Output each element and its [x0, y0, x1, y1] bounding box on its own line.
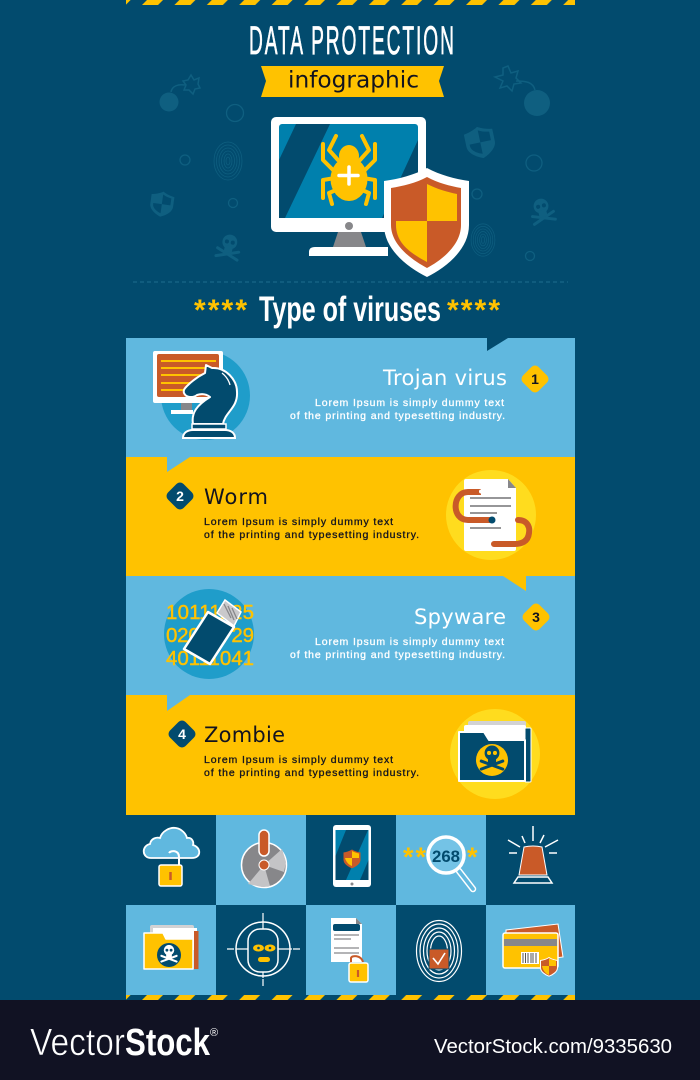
description: Lorem Ipsum is simply dummy text: [315, 397, 504, 409]
heading: Spyware: [414, 605, 506, 629]
icon: shield left: [149, 190, 175, 218]
title: DATA PROTECTION: [249, 18, 454, 63]
description: [204, 754, 419, 779]
icon: tablet shield: [333, 825, 371, 887]
icon: infected folder: [450, 709, 540, 799]
section heading: Type of viruses: [259, 290, 441, 329]
icon: alarm beacon: [508, 826, 558, 883]
description: of the printing and typesetting industry.: [290, 410, 505, 422]
faint background icons: [149, 66, 555, 260]
footer: [0, 1000, 700, 1080]
divider: [133, 281, 568, 283]
icon: disc alert: [242, 830, 286, 888]
description: [290, 397, 505, 422]
heading: Zombie: [204, 723, 285, 747]
icon: fingerprint right: [471, 224, 495, 256]
icon: document lock: [331, 918, 368, 982]
icon: magnifier password: 268: [432, 848, 460, 866]
footer logo: [30, 1022, 218, 1064]
icon: bug: [323, 136, 375, 204]
icon: magnifier password: [403, 837, 478, 889]
icon grid: [126, 815, 575, 995]
icon: trojan knight: [153, 351, 250, 440]
icon: small rings: [180, 104, 542, 260]
footer url: VectorStock.com/9335630: [434, 1036, 672, 1058]
description: Lorem Ipsum is simply dummy text: [315, 636, 504, 648]
number badge 2: 2: [176, 488, 184, 504]
description: [290, 636, 505, 661]
icon: bomb left: [160, 75, 200, 112]
grid tiles: [126, 815, 575, 995]
description: of the printing and typesetting industry.: [290, 649, 505, 661]
panel: Worm: [126, 457, 575, 576]
icon: magnifier password: **: [403, 842, 426, 872]
ribbon: infographic: [261, 66, 444, 97]
description: of the printing and typesetting industry.: [204, 529, 419, 541]
icon: usb with binary: [164, 589, 254, 679]
icon: fingerprint left: [214, 142, 242, 180]
bottom hazard stripe: [126, 995, 575, 1000]
footer logo: Vector: [30, 1022, 125, 1064]
icon: worm on document: [446, 470, 536, 560]
icon: yellow folder: [144, 925, 198, 969]
section heading: ****: [194, 294, 247, 327]
icon: usb with binary: 40111041: [166, 647, 254, 670]
number badge 4: 4: [178, 726, 186, 742]
panel: Zombie: [126, 695, 575, 815]
icon: skull left: [216, 233, 242, 260]
description: Lorem Ipsum is simply dummy text: [204, 516, 393, 528]
section heading: ****: [447, 294, 500, 327]
heading: Trojan virus: [382, 366, 507, 390]
icon: magnifier password: *: [467, 842, 478, 872]
number badge 2: [164, 480, 196, 512]
icon: cloud lock: [144, 828, 199, 886]
hero: monitor with bug and shield: [271, 117, 469, 277]
description: [204, 516, 419, 541]
icon: usb with binary: 10111125: [166, 601, 254, 624]
number badge 3: [520, 601, 552, 633]
icon: skull right: [529, 196, 555, 224]
monitor: [271, 117, 426, 256]
icon: fingerprint check: [416, 920, 462, 982]
panel: Trojan virus: [126, 338, 575, 457]
icon: credit card shield: [503, 924, 563, 976]
heading: Worm: [204, 485, 268, 509]
number badge 3: 3: [532, 609, 540, 625]
icon: shield right: [463, 124, 498, 161]
description: Lorem Ipsum is simply dummy text: [204, 754, 393, 766]
icon: bomb right: [495, 66, 550, 116]
description: of the printing and typesetting industry.: [204, 767, 419, 779]
number badge 1: 1: [531, 371, 539, 387]
icon: shield: [384, 168, 469, 277]
footer logo: ®: [210, 1027, 218, 1039]
footer logo: Stock: [125, 1022, 211, 1064]
icon: usb with binary: 02011729: [166, 624, 254, 647]
panel: Spyware: [126, 576, 575, 695]
ribbon: infographic: infographic: [288, 66, 419, 94]
icon: target mask: [227, 913, 300, 986]
number badge 4: [166, 718, 198, 750]
top hazard stripe: [126, 0, 575, 5]
number badge 1: [519, 363, 551, 395]
